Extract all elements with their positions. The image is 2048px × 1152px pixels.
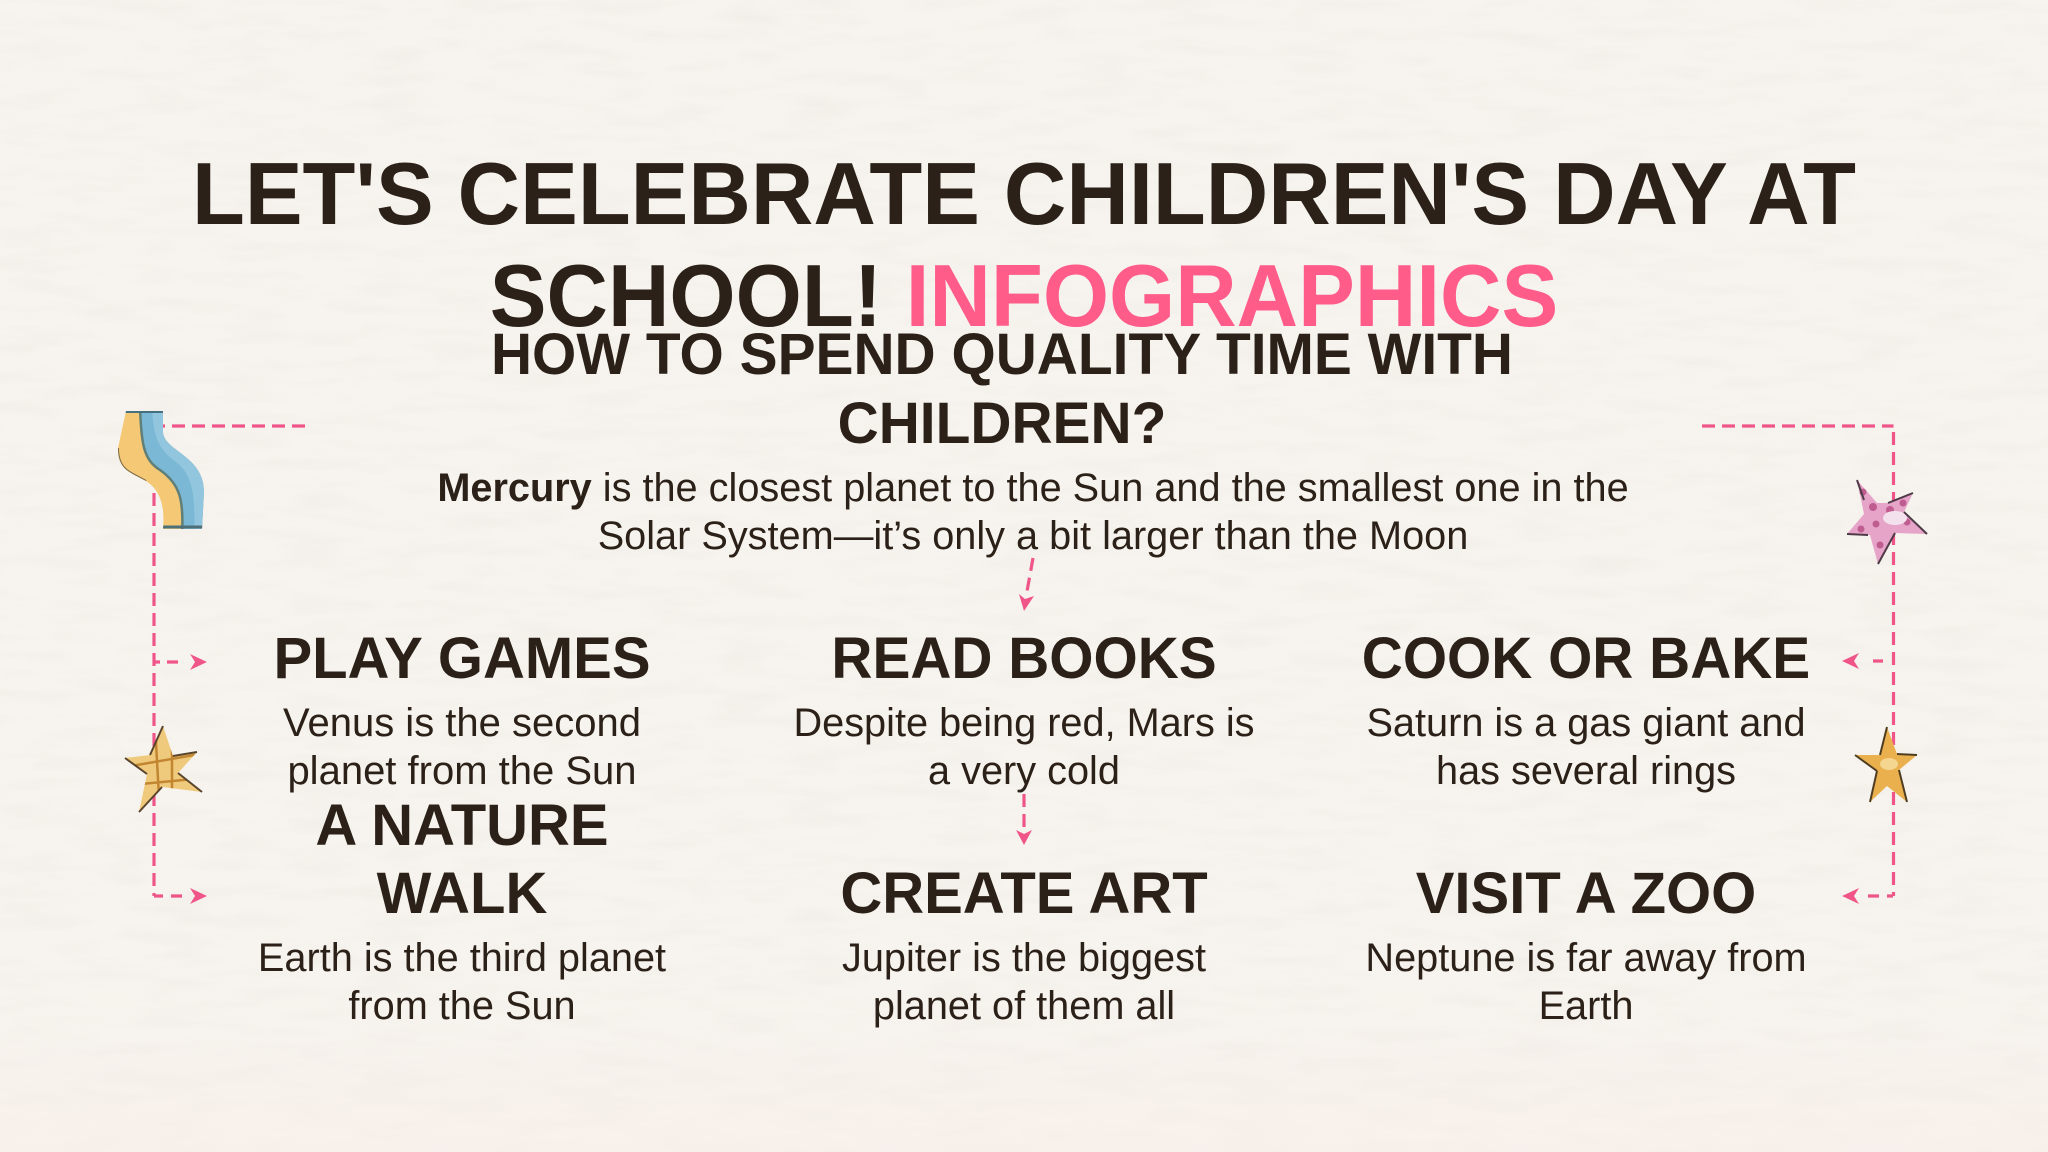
text: mars: Despite being red, Mars is — [793, 701, 1255, 745]
panel: create art — [840, 861, 1208, 1028]
intro text: Mercury is the closest planet to the Sun and the smallest one in the — [437, 466, 1629, 510]
text: saturn — [1366, 701, 1806, 793]
text: venus: planet from the Sun — [287, 749, 637, 793]
text: saturn: Saturn is a gas giant and — [1366, 701, 1806, 745]
title: SCHOOL! INFOGRAPHICS — [490, 246, 1558, 345]
panel: cook or bake — [1362, 626, 1810, 793]
panel: a nature walk — [258, 793, 666, 1028]
panel: read books — [793, 626, 1255, 793]
text: earth — [258, 936, 666, 1028]
panel: play games — [273, 626, 651, 793]
text: earth: Earth is the third planet — [258, 936, 666, 980]
subtitle: CHILDREN? — [838, 391, 1166, 456]
heading: a nature walk — [315, 793, 609, 926]
text: mars — [793, 701, 1255, 793]
text: venus — [283, 701, 641, 793]
text: earth: from the Sun — [348, 984, 576, 1028]
text: saturn: has several rings — [1436, 749, 1736, 793]
text: mars: a very cold — [928, 749, 1120, 793]
title — [192, 144, 1856, 345]
text: neptune: Earth — [1539, 984, 1633, 1028]
text: venus: Venus is the second — [283, 701, 641, 745]
intro text: Solar System—it’s only a bit larger than the Moon — [598, 514, 1468, 558]
text: neptune — [1365, 936, 1807, 1028]
text: jupiter: Jupiter is the biggest — [842, 936, 1206, 980]
heading: a nature walk: WALK — [377, 861, 547, 926]
heading: a nature walk: A NATURE — [315, 793, 609, 858]
heading: read books: READ BOOKS — [831, 626, 1217, 691]
subtitle: HOW TO SPEND QUALITY TIME WITH — [491, 322, 1513, 387]
heading: visit a zoo: VISIT A ZOO — [1416, 861, 1756, 926]
text: jupiter: planet of them all — [873, 984, 1175, 1028]
intro text — [437, 466, 1629, 558]
heading: play games: PLAY GAMES — [273, 626, 651, 691]
subtitle — [491, 322, 1513, 456]
text: jupiter — [842, 936, 1206, 1028]
panel: visit a zoo — [1365, 861, 1807, 1028]
icon: striped wave — [118, 411, 204, 529]
icon: plaid yellow star — [124, 726, 203, 813]
heading: create art: CREATE ART — [840, 861, 1208, 926]
title: LET'S CELEBRATE CHILDREN'S DAY AT — [192, 144, 1856, 243]
heading: cook or bake: COOK OR BAKE — [1362, 626, 1810, 691]
text: neptune: Neptune is far away from — [1365, 936, 1807, 980]
